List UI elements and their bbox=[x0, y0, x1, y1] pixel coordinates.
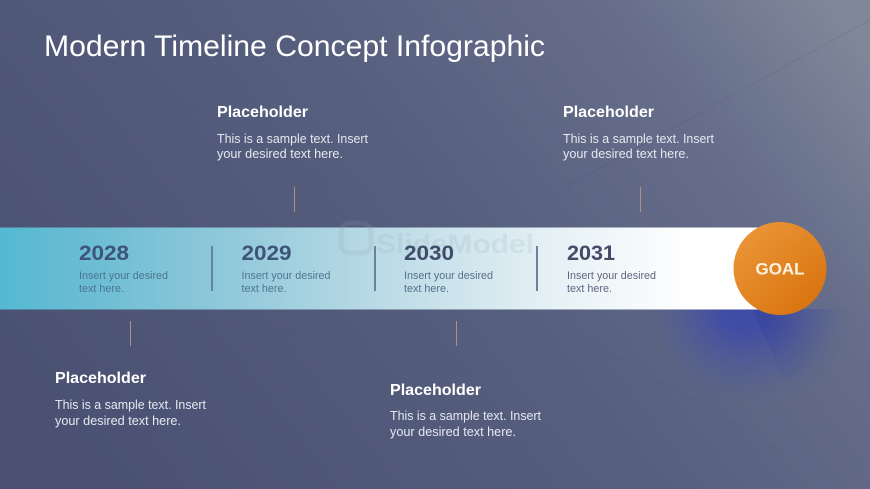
callout: bottom center: This is a sample text. Insert bbox=[390, 409, 542, 423]
callout: top right: This is a sample text. Insert bbox=[563, 132, 715, 146]
goal circle bbox=[734, 222, 826, 315]
timeline bar bbox=[0, 228, 770, 310]
blue glow beneath goal bbox=[672, 309, 828, 378]
callout: bottom center: Placeholder bbox=[390, 382, 481, 399]
milestone 2029 bbox=[242, 242, 330, 295]
callout: top right: Placeholder bbox=[563, 104, 654, 121]
goal circle: GOAL bbox=[756, 260, 804, 278]
milestone 2028: 2028 bbox=[79, 242, 129, 265]
callout: top right bbox=[563, 104, 715, 161]
milestone 2029: 2029 bbox=[242, 242, 292, 265]
connector ticks bbox=[130, 187, 640, 346]
callout: bottom center bbox=[390, 382, 542, 439]
milestone 2030: text here. bbox=[404, 283, 449, 295]
callout: top left: your desired text here. bbox=[217, 147, 343, 161]
callout: bottom left: Placeholder bbox=[55, 370, 146, 387]
milestone 2031 bbox=[567, 242, 656, 295]
milestone 2031: Insert your desired bbox=[567, 270, 656, 282]
callout: top left: This is a sample text. Insert bbox=[217, 132, 369, 146]
callout: bottom left: This is a sample text. Insert bbox=[55, 398, 207, 412]
milestone 2030: Insert your desired bbox=[404, 270, 493, 282]
callout: bottom left bbox=[55, 370, 207, 428]
milestone 2029: text here. bbox=[242, 283, 286, 295]
callout: top right: your desired text here. bbox=[563, 147, 689, 161]
watermark: SlideModel bbox=[376, 229, 534, 259]
milestone 2029: Insert your desired bbox=[242, 270, 330, 282]
callout: bottom center: your desired text here. bbox=[390, 425, 516, 439]
milestone 2028: text here. bbox=[79, 283, 124, 295]
milestone 2030 bbox=[404, 242, 493, 295]
callout: top left bbox=[217, 104, 369, 161]
milestone 2031: text here. bbox=[567, 283, 612, 295]
callout: top left: Placeholder bbox=[217, 104, 308, 121]
callout: bottom left: your desired text here. bbox=[55, 414, 181, 428]
milestone 2028: Insert your desired bbox=[79, 270, 168, 282]
milestone 2030: 2030 bbox=[404, 242, 454, 265]
milestone 2028 bbox=[79, 242, 168, 295]
title: Modern Timeline Concept Infographic bbox=[44, 30, 545, 63]
milestone 2031: 2031 bbox=[567, 242, 615, 265]
dividers bbox=[212, 246, 537, 291]
watermark bbox=[341, 223, 534, 259]
